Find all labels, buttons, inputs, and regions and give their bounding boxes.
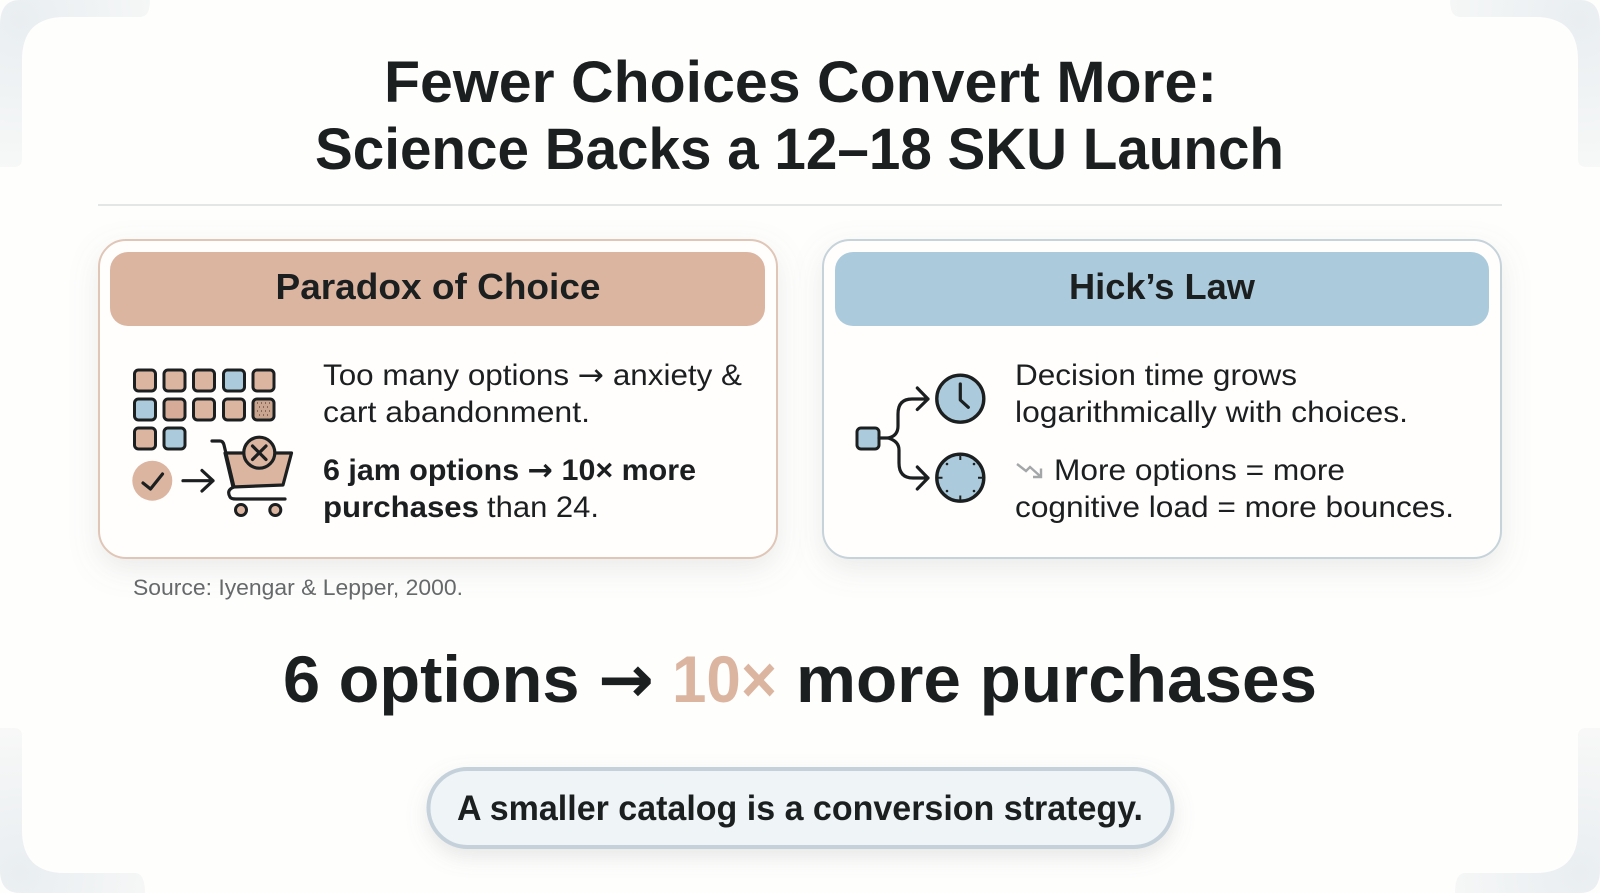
headline stat (283, 641, 1317, 718)
text: jam study: purchases (323, 491, 479, 524)
title: Fewer Choices Convert More: (384, 50, 1217, 115)
text: cognitive load: cognitive load = more bounces. (1015, 491, 1454, 524)
source note: Source: Iyengar & Lepper, 2000. (133, 575, 463, 600)
text: cognitive load (1015, 454, 1454, 524)
text: jam study: 6 jam options → 10× more (323, 453, 696, 488)
text: Hick's Law description (1015, 359, 1408, 429)
callout pill: A smaller catalog is a conversion strategy. (457, 789, 1143, 828)
text: jam study: than 24. (487, 491, 599, 524)
text: paradox description (323, 358, 742, 429)
icon: trending down (1017, 464, 1041, 477)
icon: check badge (132, 461, 172, 501)
panel: Hick's Law (823, 240, 1501, 558)
title (315, 50, 1284, 182)
panel header: Paradox of Choice: Paradox of Choice (276, 266, 600, 307)
icon: clock two (937, 454, 984, 501)
icon: branching decision (857, 388, 928, 489)
text: cognitive load: More options = more (1054, 454, 1345, 487)
icon: options grid (134, 370, 274, 449)
headline stat: more purchases (796, 642, 1317, 716)
text: Hick's Law description: logarithmically with choices. (1015, 396, 1408, 429)
panel header: Hick's Law (835, 252, 1489, 326)
headline stat: 10× (672, 642, 777, 716)
panel header: Paradox of Choice (110, 252, 765, 326)
icon: clock one (937, 375, 984, 422)
headline stat: 6 options → (283, 641, 654, 718)
callout pill (428, 769, 1172, 847)
text: Hick's Law description: Decision time grows (1015, 359, 1297, 392)
panel header: Hick's Law: Hick’s Law (1069, 266, 1256, 307)
icon: arrow to cart (183, 470, 213, 491)
text: paradox description: cart abandonment. (323, 396, 590, 429)
title: Science Backs a 12–18 SKU Launch (315, 117, 1284, 182)
panel: Paradox of Choice (99, 240, 777, 558)
icon: shopping cart with cross (212, 437, 292, 516)
text: jam study (323, 453, 696, 524)
text: paradox description: Too many options → anxiety & (323, 358, 742, 393)
